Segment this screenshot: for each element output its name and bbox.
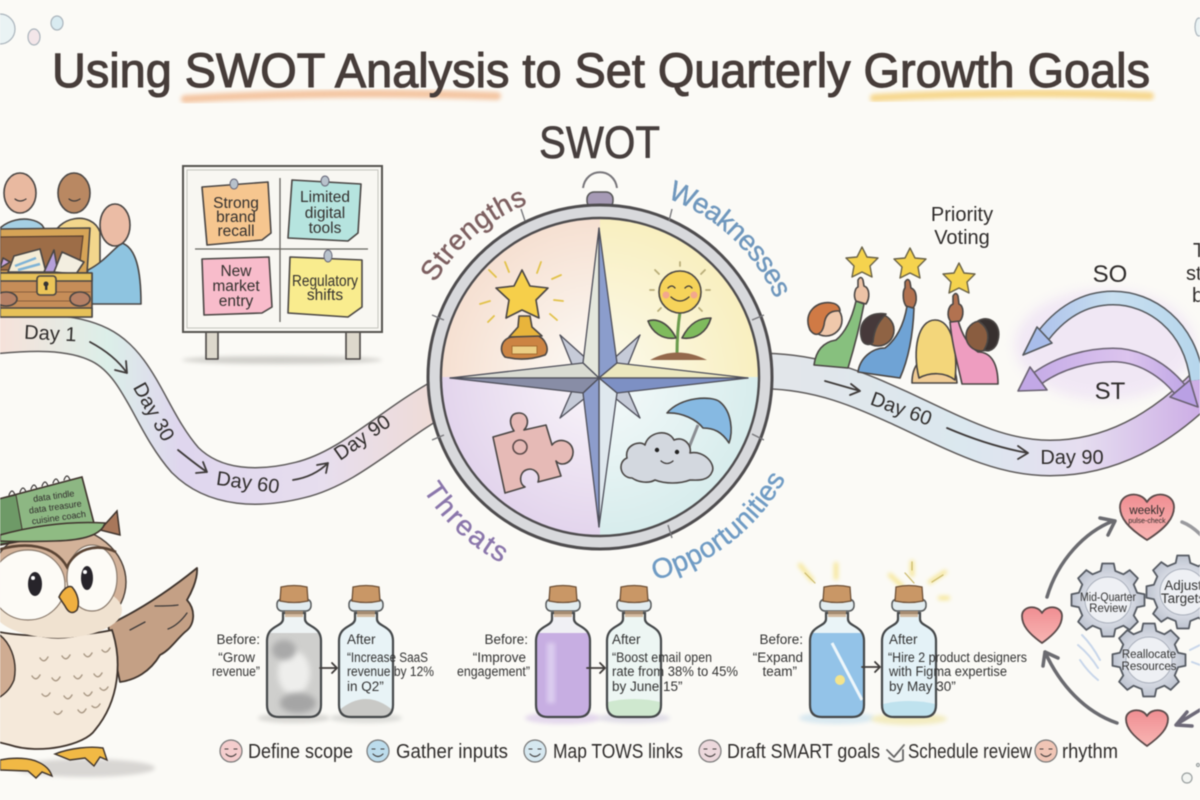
after text: by June 15”	[612, 679, 683, 694]
step: Draft SMART goals: Draft SMART goals	[727, 741, 880, 763]
owl ear tuft	[100, 511, 120, 535]
SWOT heading: SWOT	[539, 117, 660, 168]
gear: Reallocate Resources	[1112, 624, 1186, 696]
quadrant: Strengths	[441, 218, 600, 377]
cycle arrow: to bottom heart	[1176, 710, 1200, 726]
stars	[846, 247, 975, 293]
bottle: before, blue	[799, 585, 875, 725]
hands on chest	[70, 292, 90, 306]
gear: Mid-Quarter Review	[1072, 564, 1144, 636]
after text	[888, 632, 1027, 694]
after text: After	[612, 632, 641, 647]
after text: “Increase SaaS	[347, 650, 428, 665]
bottle: after, clear	[330, 585, 402, 725]
team members behind	[0, 219, 55, 250]
before text	[212, 632, 260, 679]
owl head	[0, 526, 126, 638]
heart: weekly pulse-check: weekly	[1128, 505, 1165, 517]
person reaching into chest	[80, 243, 141, 304]
cycle arrow: from weekly heart	[1182, 522, 1200, 536]
voter with blonde hair	[912, 320, 957, 383]
before text: Before:	[484, 632, 528, 647]
team with treasure chest	[0, 173, 141, 317]
treasure chest	[0, 228, 92, 317]
before text: team”	[762, 664, 797, 679]
after text: After	[889, 632, 918, 647]
quadrant: Threats	[441, 377, 600, 536]
sparkle glow	[800, 562, 948, 598]
owl cap with notebook: data treasure	[28, 498, 82, 516]
owl body	[0, 630, 118, 749]
bottle: after, pale blue	[871, 585, 947, 725]
label: Day 90: Day 90	[1040, 447, 1104, 469]
label: SO: SO	[1093, 261, 1127, 288]
owl cap with notebook	[0, 476, 105, 545]
compass ring	[428, 205, 772, 549]
heart: bottom	[1126, 710, 1168, 746]
cycle arrow: to weekly heart	[1047, 518, 1115, 597]
owl left wing	[0, 632, 15, 700]
compass loop and knob	[583, 172, 617, 188]
gear: Reallocate Resources: Reallocate	[1122, 649, 1176, 661]
owl cap with notebook: cuisine coach	[31, 509, 86, 526]
voter in green	[808, 278, 869, 368]
arrow: SO	[1023, 298, 1197, 380]
owl feet	[0, 758, 52, 778]
arrow	[862, 662, 880, 672]
board surface	[183, 166, 382, 332]
step: Gather inputs: Gather inputs	[396, 741, 508, 763]
after text: rate from 38% to 45%	[612, 664, 738, 679]
note: Strong brand recall: recall	[217, 223, 255, 240]
gear: Reallocate Resources: Resources	[1122, 661, 1177, 673]
owl beak	[59, 587, 78, 613]
arrow: Day 1 to Day 30	[90, 342, 127, 373]
right timeline road	[765, 371, 1200, 469]
icon: puzzle piece	[493, 413, 573, 493]
step: Map TOWS links: Map TOWS links	[553, 741, 683, 763]
before text: “Expand	[753, 650, 803, 665]
checklist row	[220, 740, 1118, 763]
arrow: to Day 60	[825, 381, 860, 395]
heart: weekly pulse-check: pulse-check	[1128, 518, 1166, 525]
before and after bottle pair 2	[457, 585, 738, 725]
note: Limited digital tools	[288, 176, 361, 241]
icon: cloud with umbrella	[621, 398, 731, 483]
label: ST: ST	[1095, 378, 1126, 405]
after text: in Q2”	[347, 679, 384, 694]
before text: Before:	[216, 632, 260, 647]
after text: revenue by 12%	[347, 664, 434, 679]
label: Day 60: Day 60	[868, 388, 935, 431]
note: New market entry: market	[212, 278, 260, 295]
board legs	[206, 332, 218, 359]
step: rhythm: rhythm	[1062, 741, 1118, 763]
heart: weekly pulse-check	[1120, 495, 1174, 540]
arrow: ST	[1018, 355, 1198, 407]
wavy motion lines	[1078, 635, 1200, 680]
note: Strong brand recall	[202, 179, 271, 245]
after text: “Hire 2 product designers	[888, 650, 1027, 665]
arrow: Day 60 to Day 90	[293, 463, 328, 480]
priority voting	[808, 204, 999, 384]
before text: “Improve	[473, 650, 526, 665]
label: Day 30: Day 30	[128, 379, 178, 445]
bottle: before, grey	[258, 585, 330, 725]
before and after bottle pair 1	[212, 585, 434, 725]
heart: left	[1022, 607, 1062, 643]
note: Limited digital tools: Limited	[300, 189, 350, 206]
cycle arrow: to left heart	[1043, 652, 1117, 723]
title	[52, 45, 1150, 99]
gear: Adjust Targets	[1146, 556, 1200, 628]
quadrant: Weaknesses	[600, 218, 759, 377]
gear: Mid-Quarter Review: Mid-Quarter	[1080, 592, 1136, 604]
compass star	[450, 228, 748, 527]
after text: After	[347, 632, 376, 647]
clipped side note text	[1186, 240, 1200, 307]
note: Regulatory shifts: Regulatory	[292, 273, 358, 290]
title underline: SWOT Analysis	[185, 94, 497, 99]
note: Limited digital tools: digital	[305, 205, 345, 222]
review cycle	[1022, 495, 1200, 783]
note: New market entry	[202, 257, 272, 315]
icon: smiling sun flower	[648, 262, 711, 360]
title underline: Growth Goals	[874, 93, 1150, 98]
owl pupils	[28, 572, 42, 596]
step: Define scope	[220, 740, 353, 763]
owl mascot	[0, 476, 197, 778]
before text: revenue”	[212, 664, 260, 679]
priority voting: Voting	[934, 227, 990, 249]
voting heading: Priority	[931, 204, 993, 226]
title text: Using SWOT Analysis to Set Quarterly Growth Goals	[52, 45, 1150, 98]
arc label: Weaknesses: Weaknesses	[672, 179, 788, 298]
voter in pink	[948, 294, 999, 384]
before text	[457, 632, 530, 679]
before and after bottle pair 3	[753, 562, 1027, 725]
owl shadow	[15, 759, 155, 777]
arrow	[587, 663, 605, 673]
step: Schedule review: Schedule review	[908, 741, 1032, 763]
after text	[612, 632, 738, 694]
bottle: before, purple	[525, 585, 601, 725]
icon: gold star trophy	[480, 262, 563, 359]
note: Regulatory shifts	[288, 250, 362, 317]
SWOT compass	[428, 172, 772, 549]
decorative bubbles	[0, 14, 1200, 45]
after text: by May 30”	[889, 679, 956, 694]
note: New market entry: entry	[219, 293, 253, 310]
arrow	[320, 663, 337, 673]
label: Day 60: Day 60	[215, 468, 281, 498]
quadrant: Opportunities	[600, 377, 759, 536]
TOWS arrows	[1015, 240, 1200, 407]
before text: Before:	[759, 632, 803, 647]
bottle: after, pale green	[598, 585, 670, 725]
step: rhythm	[1035, 740, 1118, 763]
owl eye discs	[0, 550, 65, 620]
note: Strong brand recall: Strong	[213, 195, 259, 212]
before text: engagement”	[457, 664, 530, 679]
arrow: Day 30 to Day 60	[178, 450, 207, 473]
arc label: Opportunities: Opportunities	[652, 472, 785, 579]
after text	[347, 632, 434, 694]
after text: with Figma expertise	[888, 664, 1007, 679]
note: Limited digital tools: tools	[309, 220, 342, 237]
owl cap with notebook: data tindle	[32, 488, 75, 504]
before text: “Grow	[218, 650, 255, 665]
small decorative circles	[1182, 764, 1200, 783]
SWOT sticky board	[182, 166, 382, 364]
left timeline road	[0, 322, 445, 498]
note: Regulatory shifts: shifts	[307, 287, 343, 304]
label: Day 90: Day 90	[330, 411, 395, 465]
gear: Mid-Quarter Review: Review	[1089, 603, 1128, 615]
arrow: to Day 90	[947, 428, 1028, 459]
after text: “Boost email open	[612, 650, 712, 665]
note: New market entry: New	[220, 263, 252, 280]
note: Strong brand recall: brand	[216, 209, 256, 226]
owl pointing wing	[108, 568, 197, 682]
step: Define scope: Define scope	[248, 741, 353, 763]
voter in blue	[858, 280, 916, 378]
arc label: Strengths: Strengths	[420, 191, 526, 281]
label: Day 1: Day 1	[24, 322, 77, 346]
before text	[753, 632, 803, 679]
arc label: Threats: Threats	[426, 479, 507, 562]
owl brow	[0, 546, 116, 567]
